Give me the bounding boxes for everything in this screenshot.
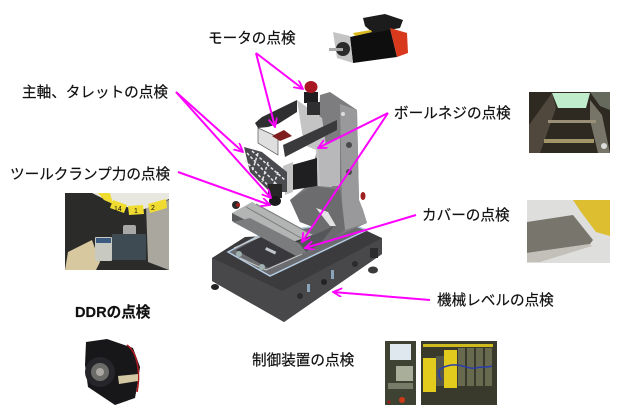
photo: tool clamp bbox=[65, 193, 169, 270]
arrow: motor to spindle head bbox=[256, 53, 275, 127]
photo: cover bbox=[527, 200, 610, 263]
arrow: spindle to turret bbox=[176, 92, 243, 152]
arrow: tool clamp bbox=[178, 172, 270, 205]
CNC panel bbox=[385, 341, 416, 405]
linear guide bbox=[297, 100, 332, 187]
arrow: spindle to tool bbox=[176, 92, 271, 198]
label: spindle and turret: 主軸、タレットの点検 bbox=[22, 84, 168, 101]
photo: control unit bbox=[385, 341, 497, 405]
photo: tool clamp: 2 bbox=[151, 205, 155, 212]
label: control unit: 制御装置の点検 bbox=[252, 352, 355, 369]
label: motor: モータの点検 bbox=[208, 30, 296, 47]
photo: ball screw bbox=[529, 92, 610, 153]
motor on column bbox=[304, 81, 320, 115]
arrow: machine level bbox=[333, 292, 430, 300]
servo amplifiers bbox=[421, 341, 497, 405]
turret bbox=[244, 147, 287, 206]
label: ball screw: ボールネジの点検 bbox=[394, 105, 511, 122]
photo: tool clamp: 14 bbox=[114, 206, 122, 213]
spindle head bbox=[255, 100, 337, 195]
machine base bbox=[211, 222, 382, 322]
arrow: motor to column motor bbox=[256, 53, 303, 89]
photo: tool clamp: 1 bbox=[134, 208, 138, 215]
guide rail lower bbox=[318, 138, 340, 186]
arrow: cover bbox=[305, 215, 416, 248]
photo: motor bbox=[329, 14, 408, 63]
arrow: ball screw lower bbox=[302, 113, 388, 242]
work table bbox=[232, 201, 334, 256]
magenta arrows bbox=[176, 53, 430, 300]
machine illustration bbox=[211, 81, 382, 322]
label: cover: カバーの点検 bbox=[422, 207, 510, 224]
arrow: ball screw upper bbox=[318, 113, 388, 148]
label: machine level: 機械レベルの点検 bbox=[437, 292, 554, 309]
photo: DDR bbox=[85, 339, 140, 405]
label: DDR: DDRの点検 bbox=[75, 303, 151, 321]
label: tool clamp force: ツールクランプ力の点検 bbox=[10, 166, 171, 183]
column bbox=[290, 92, 367, 236]
